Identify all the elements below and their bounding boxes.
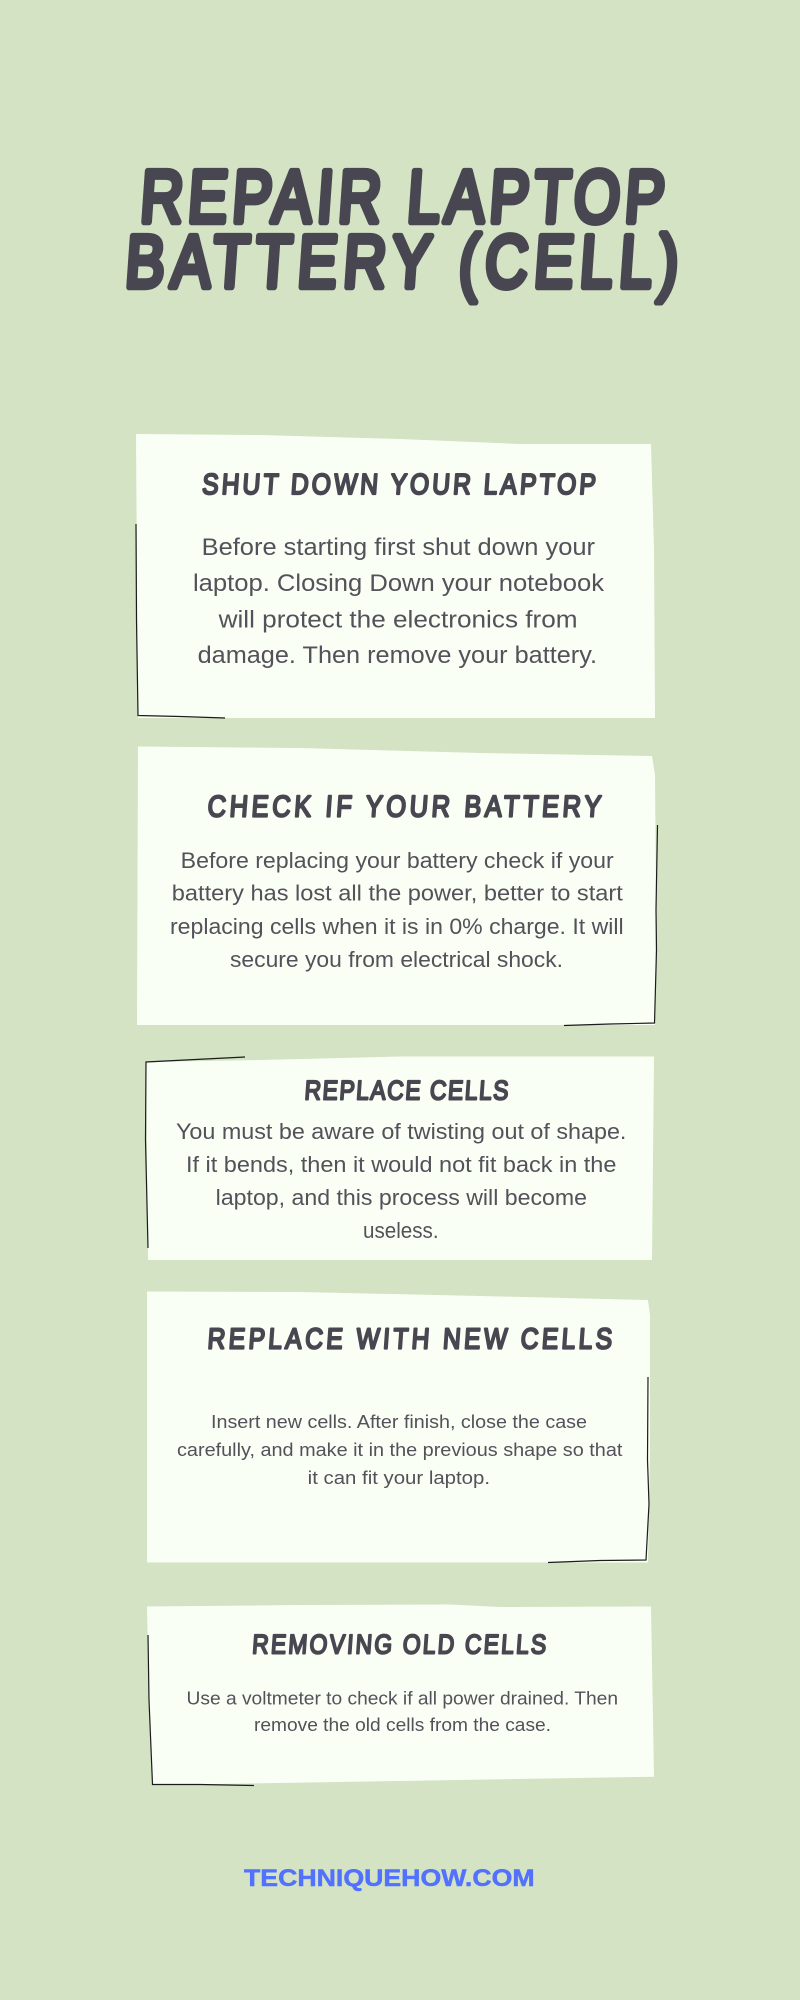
body text: If it bends, then it would not fit back in the [186,1152,616,1177]
heading: SHUT DOWN YOUR LAPTOP [201,468,597,500]
body text: laptop. Closing Down your notebook [193,570,605,597]
body text: remove the old cells from the case. [254,1715,551,1735]
footer website: TECHNIQUEHOW.COM [244,1865,535,1892]
heading: REMOVING OLD CELLS [251,1630,547,1660]
panel: shut down your laptop [136,434,655,718]
body text: laptop, and this process will become [216,1185,587,1210]
panel: replace cells [146,1056,654,1260]
title: REPAIR LAPTOP [138,156,668,239]
body text [193,534,605,669]
body text [176,1119,626,1243]
heading: REPLACE WITH NEW CELLS [207,1323,613,1355]
body text: Insert new cells. After finish, close the case [211,1411,587,1432]
body text [170,848,624,972]
body text: will protect the electronics from [218,606,578,634]
body text: useless. [363,1218,439,1243]
hand-drawn corner line [136,524,225,718]
card background [147,1604,654,1785]
body text: it can fit your laptop. [308,1467,490,1488]
panel: replace with new cells [147,1292,650,1562]
card background [146,1056,654,1260]
body text: secure you from electrical shock. [230,947,563,972]
hand-drawn corner line [548,1377,649,1562]
body text: Before starting first shut down your [202,534,595,561]
title: BATTERY (CELL) [123,221,681,304]
body text: replacing cells when it is in 0% charge. It will [170,914,624,939]
body text [177,1411,622,1488]
card background [137,746,656,1025]
body text: battery has lost all the power, better to start [172,880,623,906]
heading: REPLACE CELLS [304,1076,510,1106]
title [123,156,681,304]
panel: check if your battery [137,746,658,1026]
body text: Before replacing your battery check if your [181,848,614,873]
hand-drawn corner line [148,1635,254,1786]
heading: CHECK IF YOUR BATTERY [207,790,602,823]
body text: Use a voltmeter to check if all power drained. Then [186,1688,618,1708]
body text: damage. Then remove your battery. [198,642,597,669]
body text: carefully, and make it in the previous shape so that [177,1439,622,1460]
hand-drawn corner line [146,1057,245,1248]
body text: You must be aware of twisting out of shape. [176,1119,626,1144]
card background [147,1292,650,1562]
panel: removing old cells [147,1604,654,1786]
body text [186,1688,618,1735]
card background [136,434,655,718]
hand-drawn corner line [564,825,658,1026]
